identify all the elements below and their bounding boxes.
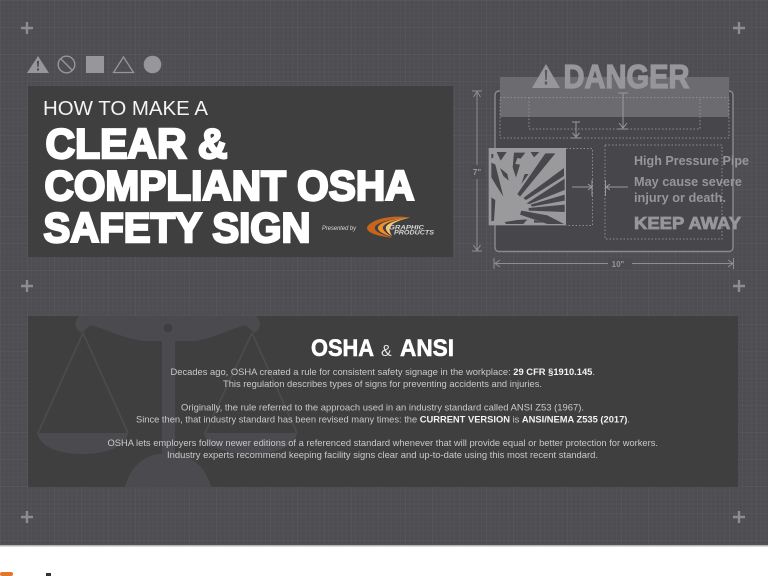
heading: danger: DANGER <box>564 58 690 95</box>
sign outline <box>495 91 733 252</box>
icon: circle <box>144 56 161 73</box>
heading: compliant osha: COMPLIANT OSHA <box>44 162 414 209</box>
panel: title <box>28 86 453 257</box>
dimension: height 7 inches <box>470 91 484 251</box>
icon: outline triangle <box>114 57 134 72</box>
icon: warning triangle <box>27 56 49 73</box>
sign text: hazard message: injury or death. <box>634 190 726 205</box>
body text: Decades ago, OSHA created a rule for consistent safety signage in the workplace: 29 CFR §1910.145. <box>170 367 595 377</box>
logo: graphic products: PRODUCTS <box>394 230 434 236</box>
heading: clear and compliant: CLEAR & <box>46 120 228 167</box>
icon: prohibition sign <box>58 56 75 73</box>
body text <box>108 367 658 460</box>
body text: Industry experts recommend keeping facility signs clear and up-to-date using this most recent standard. <box>167 450 598 460</box>
sign text: hazard message: High Pressure Pipe <box>634 153 749 168</box>
sign text: hazard message <box>634 153 749 233</box>
dimension: height 7 inches: 7" <box>473 168 481 177</box>
icon: square <box>86 56 104 73</box>
next slide peek <box>0 572 51 576</box>
body text: OSHA lets employers follow newer editions of a referenced standard whenever that will provide equal or better protection for workers. <box>108 438 658 448</box>
heading: OSHA & ANSI: & <box>381 343 392 360</box>
body text: Originally, the rule referred to the approach used in an industry standard called ANSI Z53 (1967). <box>181 402 584 412</box>
sign diagram <box>470 58 749 269</box>
sign text: hazard message: May cause severe <box>634 174 742 189</box>
logo: graphic products: GRAPHIC <box>389 224 424 232</box>
body text: This regulation describes types of signs for preventing accidents and injuries. <box>223 379 542 389</box>
heading: how to make a: HOW TO MAKE A <box>43 97 208 120</box>
danger header band <box>500 77 729 117</box>
heading: OSHA & ANSI <box>311 335 454 362</box>
icon: balance scales <box>37 316 297 487</box>
dotted margin guides <box>500 98 729 239</box>
sign text: hazard message: KEEP AWAY <box>634 213 741 233</box>
bottom page edge <box>0 545 768 546</box>
heading: safety sign: SAFETY SIGN <box>44 204 310 251</box>
icon: explosion hazard symbol <box>489 148 566 225</box>
panel: OSHA and ANSI <box>28 316 738 487</box>
dimension: width 10 inches <box>494 258 734 269</box>
margin arrows <box>571 93 628 196</box>
logo: graphic products <box>367 217 434 238</box>
icon: danger triangle <box>532 64 560 88</box>
presented by label: Presented by <box>322 226 357 232</box>
safety symbol icons <box>27 56 161 73</box>
dimension: width 10 inches: 10" <box>612 260 625 269</box>
heading: OSHA & ANSI: OSHA <box>311 335 374 362</box>
heading: OSHA & ANSI: ANSI <box>400 335 454 362</box>
body text: Since then, that industry standard has been revised many times: the CURRENT VERSION is ANSI/NEMA Z535 (2017). <box>136 414 630 424</box>
